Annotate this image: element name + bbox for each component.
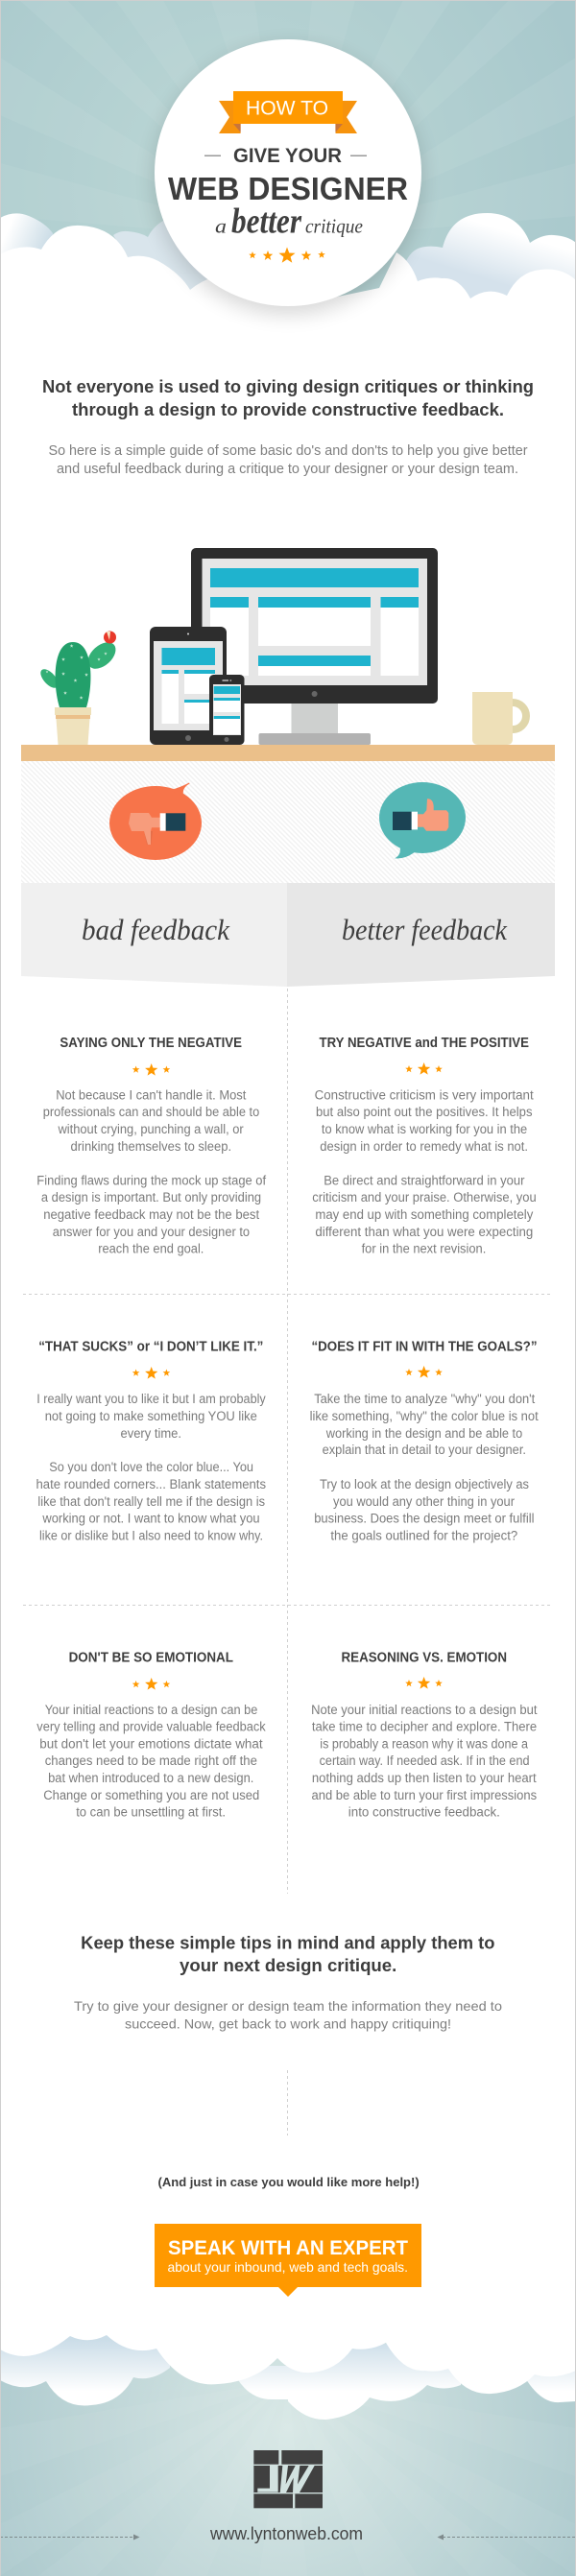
- panel: that sucks: [36, 1340, 266, 1543]
- panel: does it fit with the goals: business. Does the design meet or fulfill: [314, 1511, 534, 1526]
- icon: thumbs up bubble: [379, 782, 466, 858]
- panel: does it fit with the goals: Try to look at the design objectively as: [320, 1477, 529, 1491]
- panel: that sucks: hate rounded corners... Blank statements: [36, 1477, 266, 1491]
- icon: cactus: [37, 632, 121, 745]
- panel: does it fit with the goals: [310, 1340, 539, 1543]
- panel: reasoning vs. emotion: REASONING VS. EMOTION: [342, 1651, 507, 1666]
- closing text: succeed. Now, get back to work and happy critiquing!: [125, 2015, 451, 2031]
- ribbon: how to: [219, 91, 357, 133]
- panel: does it fit with the goals: working in the design and be able to: [325, 1426, 522, 1441]
- column header: better feedback: [287, 883, 555, 987]
- intro text: and useful feedback during a critique to your designer or your design team.: [57, 462, 518, 477]
- panel: that sucks: every time.: [121, 1426, 181, 1441]
- panel: saying only the negative: Not because I can't handle it. Most: [56, 1087, 247, 1102]
- footer sky: [0, 2332, 576, 2576]
- title text: better: [231, 202, 302, 242]
- panel: try negative and the positive: different than what you were expecting: [315, 1225, 533, 1239]
- panel: try negative and the positive: Constructive criticism is very important: [315, 1087, 534, 1102]
- title text: WEB DESIGNER: [168, 171, 408, 206]
- panel: try negative and the positive: criticism and your praise. Otherwise, you: [312, 1190, 537, 1205]
- panel: does it fit with the goals: the goals outlined for the project?: [330, 1528, 517, 1543]
- panel: that sucks: “THAT SUCKS” or “I DON’T LIKE IT.”: [38, 1340, 263, 1355]
- panel: saying only the negative: Finding flaws during the mock up stage of: [36, 1173, 266, 1188]
- panel: saying only the negative: SAYING ONLY THE NEGATIVE: [60, 1036, 242, 1051]
- intro text: So here is a simple guide of some basic do's and don'ts to help you give better: [48, 443, 528, 459]
- header clouds: [0, 213, 576, 331]
- panel: saying only the negative: a design is important. But only providing: [41, 1190, 261, 1205]
- panel: does it fit with the goals: Take the time to analyze "why" you don't: [314, 1392, 535, 1406]
- column header: better feedback: better feedback: [342, 913, 508, 946]
- closing heading: [81, 1933, 494, 1975]
- icon: phone: [209, 675, 244, 745]
- logo: LW mark: [253, 2450, 323, 2508]
- callout: speak with an expert: [155, 2224, 421, 2297]
- closing text: [74, 1998, 502, 2031]
- title text: GIVE YOUR: [233, 145, 342, 167]
- intro heading: Not everyone is used to giving design critiques or thinking: [42, 377, 534, 396]
- panel: reasoning vs. emotion: is probably a reason why it was done a: [320, 1737, 528, 1751]
- panel: reasoning vs. emotion: [311, 1651, 538, 1820]
- intro heading: through a design to provide constructive feedback.: [72, 400, 504, 419]
- panel: don't be so emotional: but don't let your emotions dictate what: [39, 1737, 263, 1751]
- column dividers: [23, 989, 553, 2135]
- panel: does it fit with the goals: like something, "why" the color blue is not: [310, 1409, 539, 1423]
- panel: don't be so emotional: changes need to be made right off the: [45, 1753, 257, 1768]
- panel: reasoning vs. emotion: into constructive feedback.: [348, 1804, 500, 1820]
- panel: reasoning vs. emotion: Note your initial reactions to a design but: [311, 1703, 538, 1717]
- callout: speak with an expert: about your inbound, web and tech goals.: [167, 2259, 408, 2275]
- panel: that sucks: like that don't really tell me if the design is: [37, 1494, 265, 1509]
- title badge circle: [155, 39, 421, 314]
- panel: don't be so emotional: bat when introduced to a new design.: [48, 1771, 253, 1785]
- closing text: Try to give your designer or design team the information they need to: [74, 1998, 502, 2014]
- panel: that sucks: So you don't love the color blue... You: [49, 1460, 253, 1474]
- panel: don't be so emotional: very telling and provide valuable feedback: [36, 1720, 266, 1733]
- website url: www.lyntonweb.com: [209, 2524, 363, 2543]
- panel: try negative and the positive: for in the next revision.: [362, 1242, 486, 1255]
- panel: reasoning vs. emotion: and be able to turn your first impressions: [311, 1788, 537, 1802]
- panel: try negative and the positive: [312, 1036, 537, 1255]
- panel: does it fit with the goals: you would any other thing in your: [333, 1494, 515, 1509]
- arrow: left pointer: [0, 2534, 140, 2540]
- panel: try negative and the positive: Be direct and straightforward in your: [324, 1173, 525, 1188]
- panel: that sucks: not going to make something YOU like: [45, 1409, 257, 1423]
- column header: bad feedback: [21, 883, 287, 987]
- panel: don't be so emotional: to can be unsettling at first.: [76, 1804, 226, 1820]
- panel: saying only the negative: without crying, punching a wall, or: [58, 1122, 244, 1136]
- panel: saying only the negative: drinking themselves to sleep.: [71, 1139, 231, 1154]
- panel: that sucks: working or not. I want to know what you: [41, 1511, 260, 1526]
- panel: saying only the negative: answer for you and your designer to: [53, 1225, 250, 1239]
- panel: does it fit with the goals: “DOES IT FIT IN WITH THE GOALS?”: [311, 1340, 538, 1355]
- panel: try negative and the positive: TRY NEGATIVE and THE POSITIVE: [319, 1036, 529, 1051]
- arrow: right pointer: [438, 2534, 576, 2540]
- panel: don't be so emotional: [36, 1651, 266, 1820]
- hatched desk panel: [21, 761, 555, 883]
- panel: don't be so emotional: DON'T BE SO EMOTIONAL: [69, 1651, 233, 1666]
- panel: reasoning vs. emotion: nothing adds up then listen to your heart: [312, 1771, 537, 1785]
- panel: try negative and the positive: but also point out the positives. It helps: [316, 1105, 533, 1119]
- closing heading: your next design critique.: [180, 1956, 396, 1975]
- ribbon: how to: HOW TO: [246, 98, 328, 119]
- panel: try negative and the positive: may end up with something completely: [315, 1207, 534, 1222]
- help note: (And just in case you would like more help!): [157, 2175, 420, 2189]
- desk top: [21, 745, 555, 761]
- icon: thumbs down bubble: [109, 783, 202, 860]
- panel: reasoning vs. emotion: certain way. If needed ask. If in the end: [320, 1753, 530, 1768]
- header sky: [0, 0, 576, 298]
- intro heading: [42, 377, 534, 419]
- panel: don't be so emotional: Change or something you are not used: [43, 1788, 259, 1802]
- footer clouds: [0, 2323, 576, 2420]
- title text: [168, 145, 408, 242]
- panel: that sucks: I really want you to like it but I am probably: [36, 1392, 266, 1406]
- title stars: [249, 248, 325, 263]
- panel: saying only the negative: [36, 1036, 266, 1255]
- title text: a: [215, 215, 227, 238]
- title text: critique: [305, 215, 363, 238]
- panel: try negative and the positive: to know what is working for you in the: [322, 1122, 527, 1136]
- panel: don't be so emotional: Your initial reactions to a design can be: [45, 1703, 257, 1717]
- panel: reasoning vs. emotion: take time to decipher and explore. There: [312, 1720, 537, 1733]
- panel: try negative and the positive: design in order to remedy what is not.: [320, 1139, 528, 1154]
- callout: speak with an expert: SPEAK WITH AN EXPERT: [168, 2237, 408, 2259]
- column header: bad feedback: bad feedback: [82, 913, 230, 946]
- panel: that sucks: like or dislike but I also need to know why.: [39, 1528, 263, 1543]
- intro text: [48, 443, 528, 477]
- icon: tablet: [150, 627, 227, 745]
- panel: saying only the negative: negative feedback may not be the best: [43, 1207, 259, 1222]
- closing heading: Keep these simple tips in mind and apply them to: [81, 1933, 494, 1952]
- panel: does it fit with the goals: explain that in detail to your designer.: [323, 1443, 526, 1457]
- icon: coffee mug: [472, 692, 526, 745]
- panel: saying only the negative: professionals can and should be able to: [43, 1105, 259, 1119]
- panel: saying only the negative: reach the end goal.: [98, 1242, 204, 1255]
- icon: desktop monitor: [191, 548, 438, 745]
